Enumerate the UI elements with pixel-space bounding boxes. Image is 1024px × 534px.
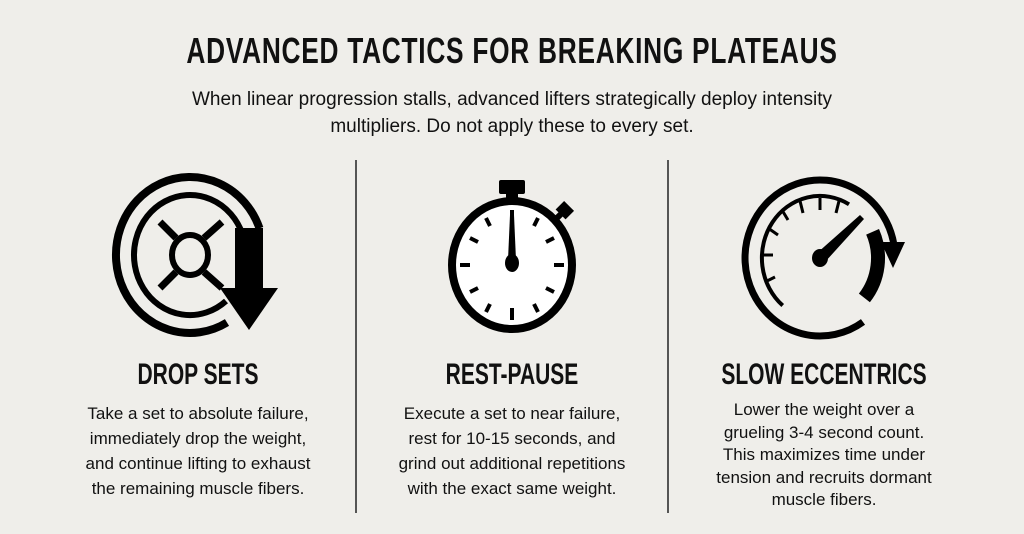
text: and continue lifting to exhaust [86, 454, 310, 473]
text [86, 404, 310, 498]
text: the remaining muscle fibers. [92, 479, 304, 498]
text [399, 404, 625, 498]
heading: SLOW ECCENTRICS [721, 358, 927, 391]
panel: rest-pause [399, 180, 625, 498]
subtitle: When linear progression stalls, advanced lifters strategically deploy intensity [192, 89, 832, 110]
icon: stopwatch [448, 180, 576, 333]
heading: REST-PAUSE [446, 358, 578, 391]
heading: DROP SETS [138, 358, 258, 391]
panel: slow eccentrics [716, 176, 932, 509]
text: Execute a set to near failure, [404, 404, 620, 423]
text: muscle fibers. [772, 490, 876, 509]
text: grueling 3-4 second count. [724, 422, 924, 442]
text: tension and recruits dormant [716, 468, 932, 486]
text [716, 400, 932, 509]
text: rest for 10-15 seconds, and [409, 429, 615, 448]
subtitle: multipliers. Do not apply these to every set. [330, 116, 694, 137]
panel: drop sets [86, 173, 310, 498]
text: Lower the weight over a [734, 400, 914, 419]
text: with the exact same weight. [408, 479, 616, 498]
text: This maximizes time under [723, 445, 925, 464]
text: Take a set to absolute failure, [87, 404, 309, 423]
text: grind out additional repetitions [399, 454, 625, 473]
subtitle [192, 89, 832, 137]
icon: weight plate with down arrow [112, 173, 278, 337]
text: immediately drop the weight, [90, 429, 306, 448]
title: ADVANCED TACTICS FOR BREAKING PLATEAUS [186, 30, 838, 71]
icon: gauge with arrow [742, 176, 905, 340]
